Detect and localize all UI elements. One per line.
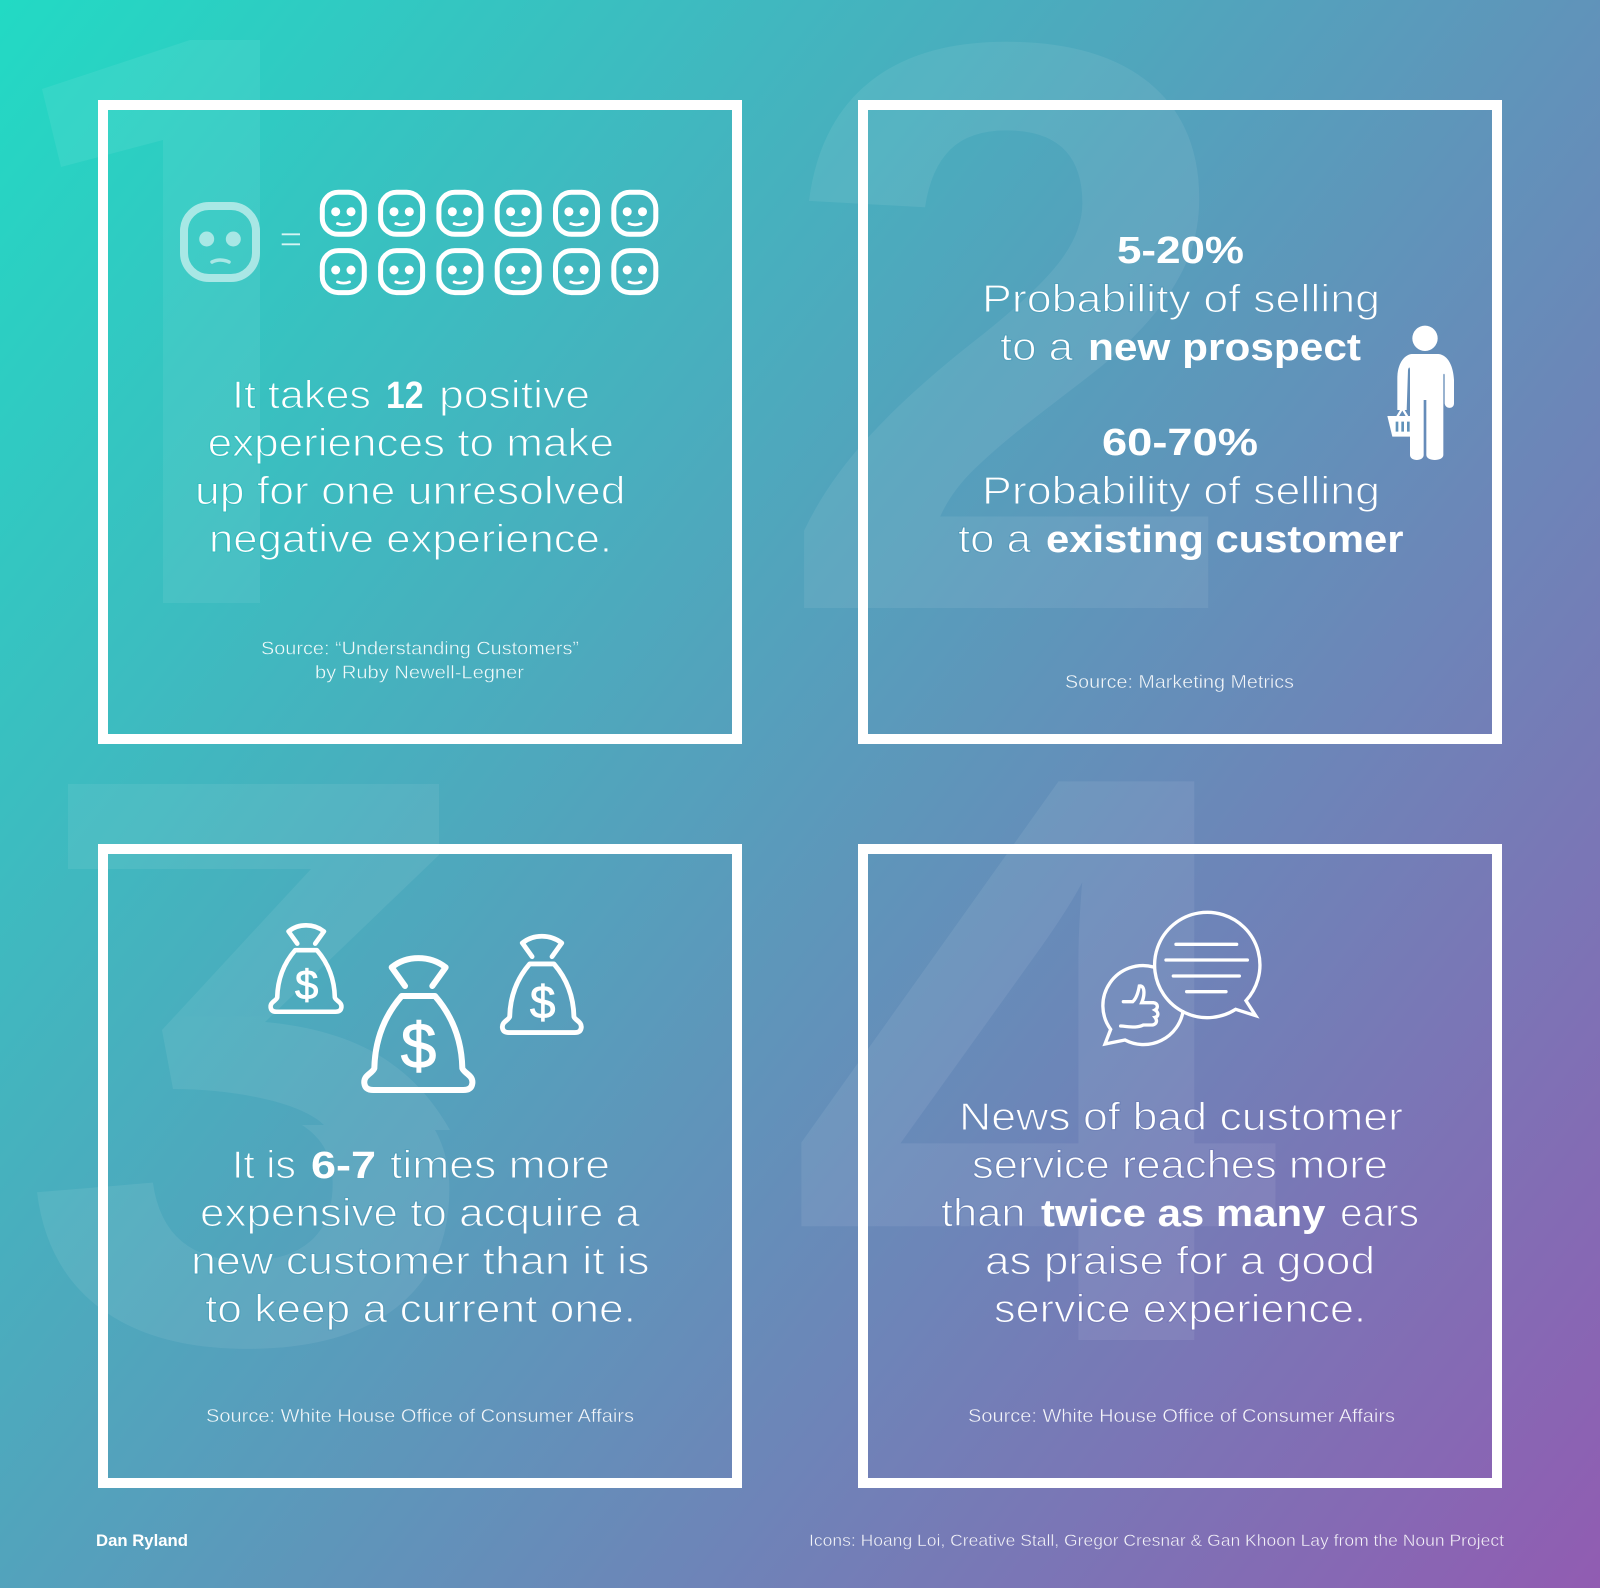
source: Source: White House Office of Consumer Affairs [206,1406,634,1426]
statement text: It takes [232,374,371,417]
source [261,639,579,683]
statement text: to keep a current one. [205,1288,636,1331]
statement text: times more [390,1144,610,1187]
statement text: up for one unresolved [195,470,626,513]
panel: 12 positive experiences [103,105,737,739]
ghost numeral 3: 3 [18,625,479,1508]
source: Source: White House Office of Consumer Affairs [968,1406,1395,1426]
statement text: experiences to make [208,422,614,465]
statement text [941,1096,1419,1331]
statement text: service reaches more [972,1144,1388,1187]
source: Source: Marketing Metrics [1065,672,1294,692]
stat: existing customer [958,422,1404,561]
statement text: negative experience. [209,518,612,561]
panel frame [103,105,737,739]
statement text [191,1144,650,1331]
stat: existing customer: to a [958,518,1031,561]
panel frame [863,849,1497,1483]
stat: new prospect: to a [1000,326,1073,369]
statement text [195,374,626,561]
ghost numeral 3 [37,784,450,1349]
statement text: It is [232,1144,296,1187]
icon: three money bags [271,925,581,1090]
source: by Ruby Newell-Legner [315,663,524,683]
panel frame [103,849,737,1483]
statement text: 6-7 [311,1145,376,1187]
statement text: service experience. [994,1288,1366,1331]
equals sign [282,234,300,244]
panel frame [863,105,1497,739]
ghost numeral 4: 4 [788,605,1286,1512]
icon: three money bags: $ [530,976,555,1028]
icon: three money bags: $ [295,961,318,1008]
icon: speech bubbles with thumbs up [1103,912,1260,1045]
stat: new prospect: Probability of selling [982,278,1380,321]
small left bag [271,925,341,1012]
icon: grid of twelve happy faces [322,192,656,293]
statement text: 12 [386,375,424,417]
statement text: News of bad customer [959,1096,1403,1139]
stat: new prospect [982,230,1380,369]
stat: existing customer: 60-70% [1102,422,1258,464]
large centre bag [364,958,472,1090]
small right bag [502,936,581,1033]
ghost numeral 1 [42,40,260,603]
stat: new prospect: 5-20% [1117,230,1244,272]
icon: person with shopping basket [1387,326,1454,460]
statement text: ears [1340,1192,1419,1235]
panel: selling probability [863,105,1497,739]
icon: sad face [184,206,256,278]
statement text: than [941,1192,1026,1235]
statement text: new customer than it is [191,1240,650,1283]
source: Source: “Understanding Customers” [261,639,579,659]
icon: three money bags: $ [401,1010,436,1082]
panel: cost of acquisition [103,849,737,1483]
panel: word of mouth [863,849,1497,1483]
statement text: expensive to acquire a [200,1192,640,1235]
statement text: twice as many [1041,1193,1326,1235]
statement text: as praise for a good [985,1240,1375,1283]
icon credits: Icons: Hoang Loi, Creative Stall, Gregor Cresnar & Gan Khoon Lay from the Noun Project [809,1531,1504,1550]
stat: new prospect: new prospect [1088,327,1361,369]
stat: existing customer: Probability of selling [982,470,1380,513]
author credit: Dan Ryland [96,1532,188,1550]
stat: existing customer: existing customer [1046,519,1404,561]
statement text: positive [439,374,590,417]
